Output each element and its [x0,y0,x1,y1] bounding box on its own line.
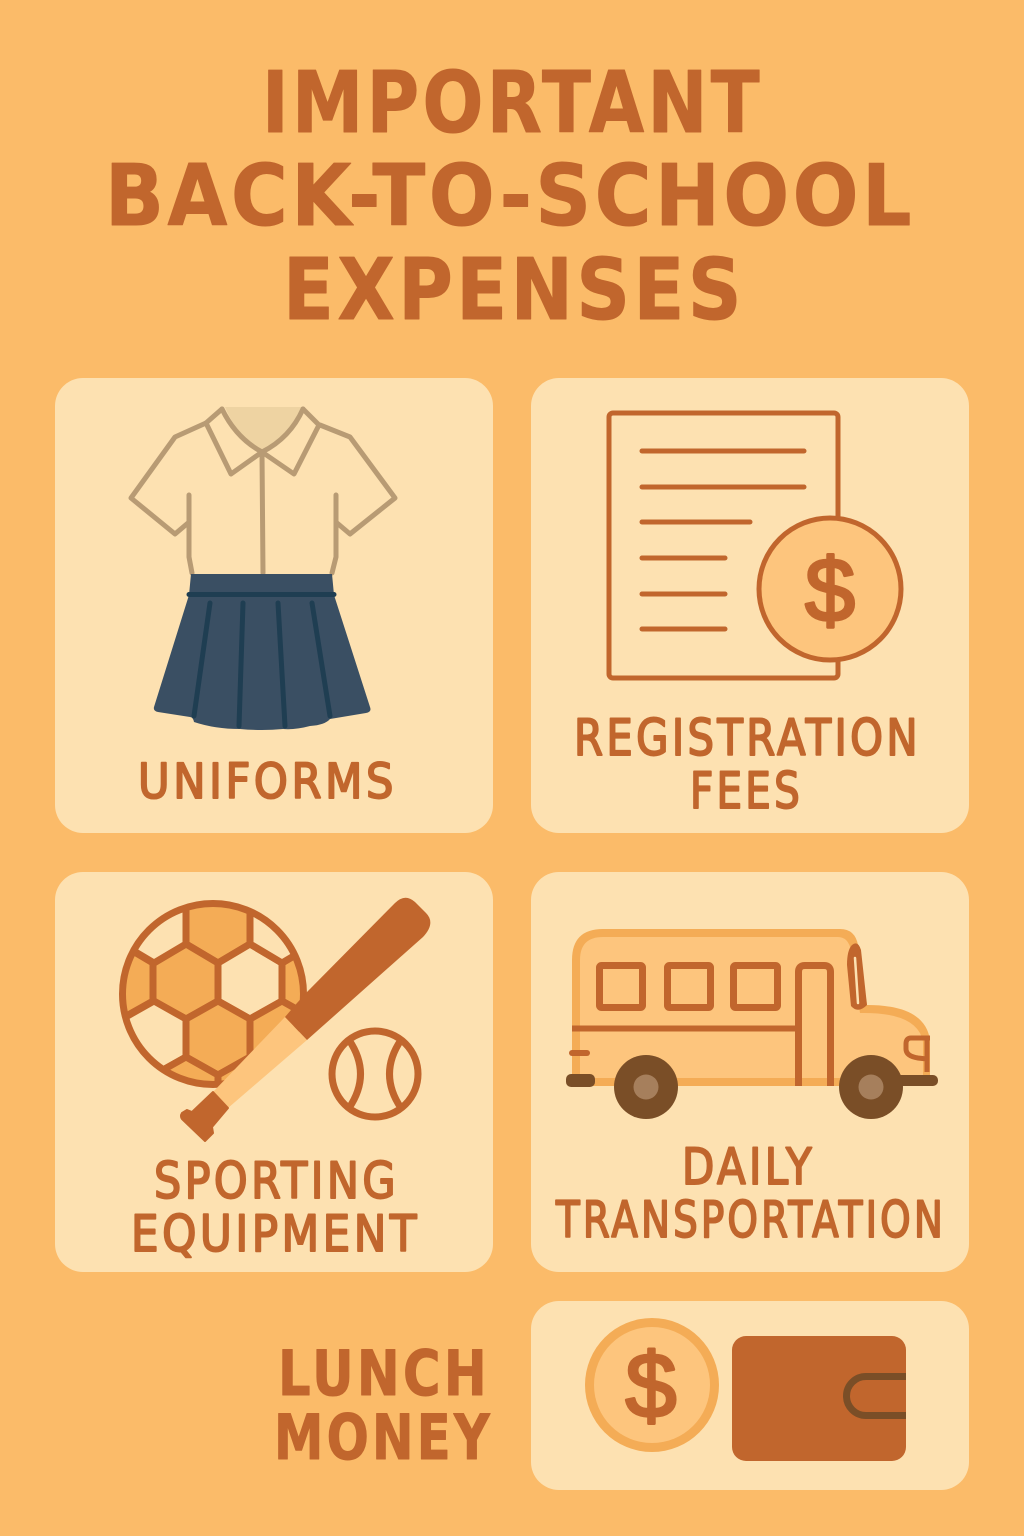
label: lunch money: MONEY [274,1401,493,1474]
label: uniforms: UNIFORMS [138,754,397,810]
label: lunch money [274,1337,493,1474]
icon: baseball [332,1031,418,1117]
icon: coin [585,1318,719,1452]
label: daily transportation [555,1138,946,1249]
title: EXPENSES [283,241,745,340]
label: sporting equipment: EQUIPMENT [131,1205,420,1263]
panel: sporting equipment [55,872,493,1272]
panel: uniforms [55,378,493,833]
title: IMPORTANT [262,54,763,153]
label: sporting equipment: SPORTING [154,1152,399,1210]
icon: wallet [732,1336,906,1461]
title [105,54,915,340]
label: daily transportation: DAILY [682,1138,815,1196]
panel: registration fees [531,378,969,833]
label: lunch money: LUNCH [278,1337,490,1410]
icon: soccer ball [119,900,307,1088]
label: registration fees: REGISTRATION [574,709,921,767]
icon: document with dollar coin [609,413,901,678]
label: registration fees [574,709,921,820]
icon: baseball bat [181,898,430,1141]
icon: uniform [131,407,395,730]
panel: lunch money [531,1301,969,1490]
label: sporting equipment [131,1152,420,1263]
icon: coin: $ [625,1335,677,1437]
icon: school bus [566,929,938,1119]
icon: document with dollar coin: $ [805,541,855,641]
panel: daily transportation [531,872,969,1272]
title: BACK-TO-SCHOOL [105,147,915,246]
label: registration fees: FEES [690,762,803,820]
